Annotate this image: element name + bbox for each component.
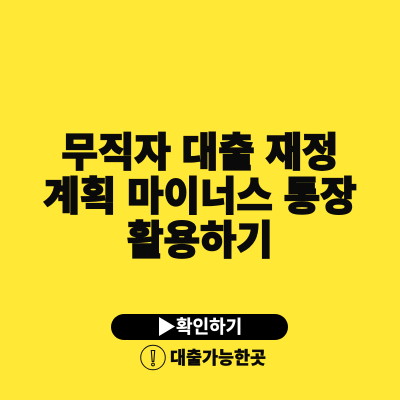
title: 무직자 대출 재정 <box>62 131 338 175</box>
title: 계획 마이너스 통장 <box>43 175 357 219</box>
icon: exclamation circle <box>140 344 166 370</box>
brand name: 대출가능한곳 <box>170 348 266 368</box>
button: confirm <box>111 314 288 340</box>
button label: 확인하기 <box>176 317 242 337</box>
brand row <box>140 344 266 370</box>
icon: play triangle <box>159 317 175 336</box>
title <box>43 131 357 263</box>
title: 활용하기 <box>127 219 273 263</box>
